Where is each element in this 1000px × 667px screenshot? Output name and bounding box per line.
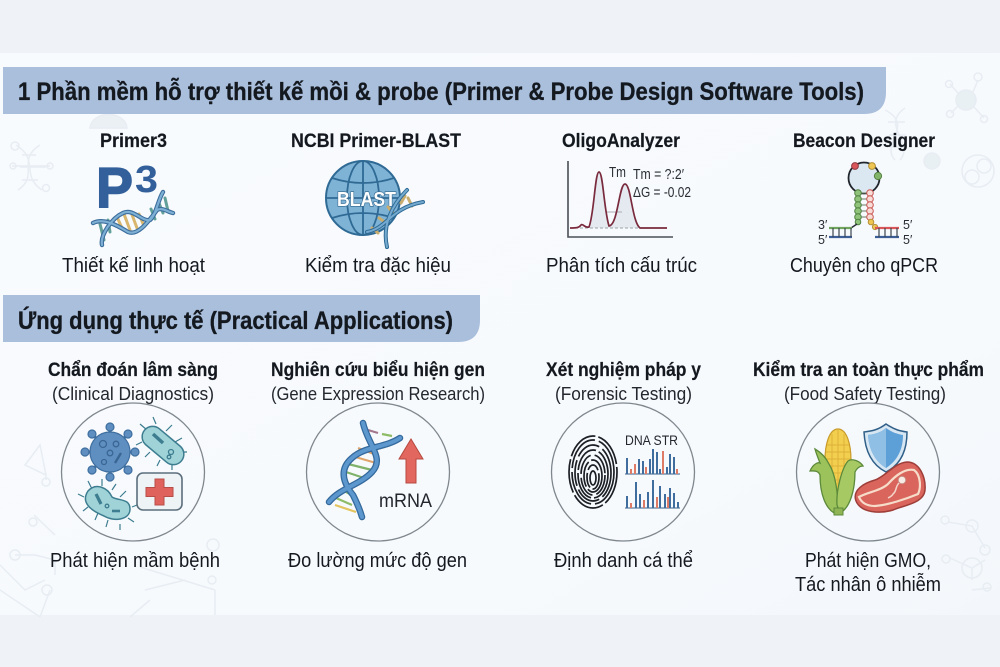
icon: BLAST globe with DNA: BLAST xyxy=(337,189,396,211)
icon: molecular beacon: 5′ xyxy=(903,233,913,247)
icon: fingerprint and DNA STR charts in circle: DNA STR xyxy=(625,433,678,448)
caption: Thiết kế linh hoạt xyxy=(62,254,205,277)
panel: NCBI Primer-BLAST xyxy=(291,130,461,277)
chart: melting curve: Tm = ?:2′ xyxy=(633,166,684,183)
tool name: OligoAnalyzer xyxy=(562,130,680,152)
subtitle: (Gene Expression Research) xyxy=(271,384,485,404)
subtitle: (Forensic Testing) xyxy=(555,384,692,404)
icon: DNA and mRNA arrow in circle xyxy=(306,403,450,541)
caption: Kiểm tra đặc hiệu xyxy=(305,254,451,277)
panel: OligoAnalyzer xyxy=(546,130,697,277)
caption: line 2: Tác nhân ô nhiễm xyxy=(795,573,941,596)
icon: molecular beacon: 5′ xyxy=(818,233,828,247)
heading: practical applications: Ứng dụng thực tế (Practical Applications) xyxy=(18,305,453,335)
subtitle: (Food Safety Testing) xyxy=(784,384,946,404)
panel: clinical diagnostics xyxy=(48,359,220,572)
caption: Chuyên cho qPCR xyxy=(790,254,938,277)
caption: Đo lường mức độ gen xyxy=(288,549,467,572)
panel: forensic testing xyxy=(546,359,701,572)
icon: molecular beacon: 3′ xyxy=(818,218,828,232)
icon: molecular beacon xyxy=(818,162,913,247)
tool name: Beacon Designer xyxy=(793,130,935,152)
panel: Primer3 xyxy=(62,130,205,277)
title: Xét nghiệm pháp y xyxy=(546,359,701,381)
title: Chẩn đoán lâm sàng xyxy=(48,359,218,381)
tool name: Primer3 xyxy=(100,130,167,152)
panel: food safety testing xyxy=(753,359,984,596)
subtitle: (Clinical Diagnostics) xyxy=(52,384,214,404)
icon: fingerprint and DNA STR charts in circle xyxy=(552,403,694,541)
banner: software tools xyxy=(3,67,886,114)
panel: gene expression research xyxy=(271,359,485,572)
icon: DNA and mRNA arrow in circle: mRNA xyxy=(379,490,432,512)
banner: practical applications xyxy=(3,295,480,342)
icon: corn, shield and meat in circle xyxy=(796,403,940,541)
caption: Phân tích cấu trúc xyxy=(546,254,697,277)
heading: software tools: 1 Phần mềm hỗ trợ thiết kế mồi & probe (Primer & Probe Design Software Tools) xyxy=(18,76,864,106)
title: Nghiên cứu biểu hiện gen xyxy=(271,359,485,381)
icon: P3 logo with DNA xyxy=(93,156,173,245)
icon: molecular beacon: 5′ xyxy=(903,218,913,232)
chart: melting curve: Tm xyxy=(609,164,626,181)
caption: line 1: Phát hiện GMO, xyxy=(805,549,931,572)
panel: Beacon Designer xyxy=(790,130,938,277)
icon: pathogens in circle xyxy=(62,403,204,541)
icon: P3 logo with DNA: 3 xyxy=(135,159,158,201)
chart: melting curve: ΔG = -0.02 xyxy=(633,184,691,201)
icon: P3 logo with DNA: P xyxy=(96,156,133,220)
tool name: NCBI Primer-BLAST xyxy=(291,130,461,152)
icon: BLAST globe with DNA xyxy=(326,161,423,247)
chart: melting curve xyxy=(568,161,691,237)
caption: Định danh cá thể xyxy=(554,549,693,572)
caption: Phát hiện mầm bệnh xyxy=(50,549,220,572)
